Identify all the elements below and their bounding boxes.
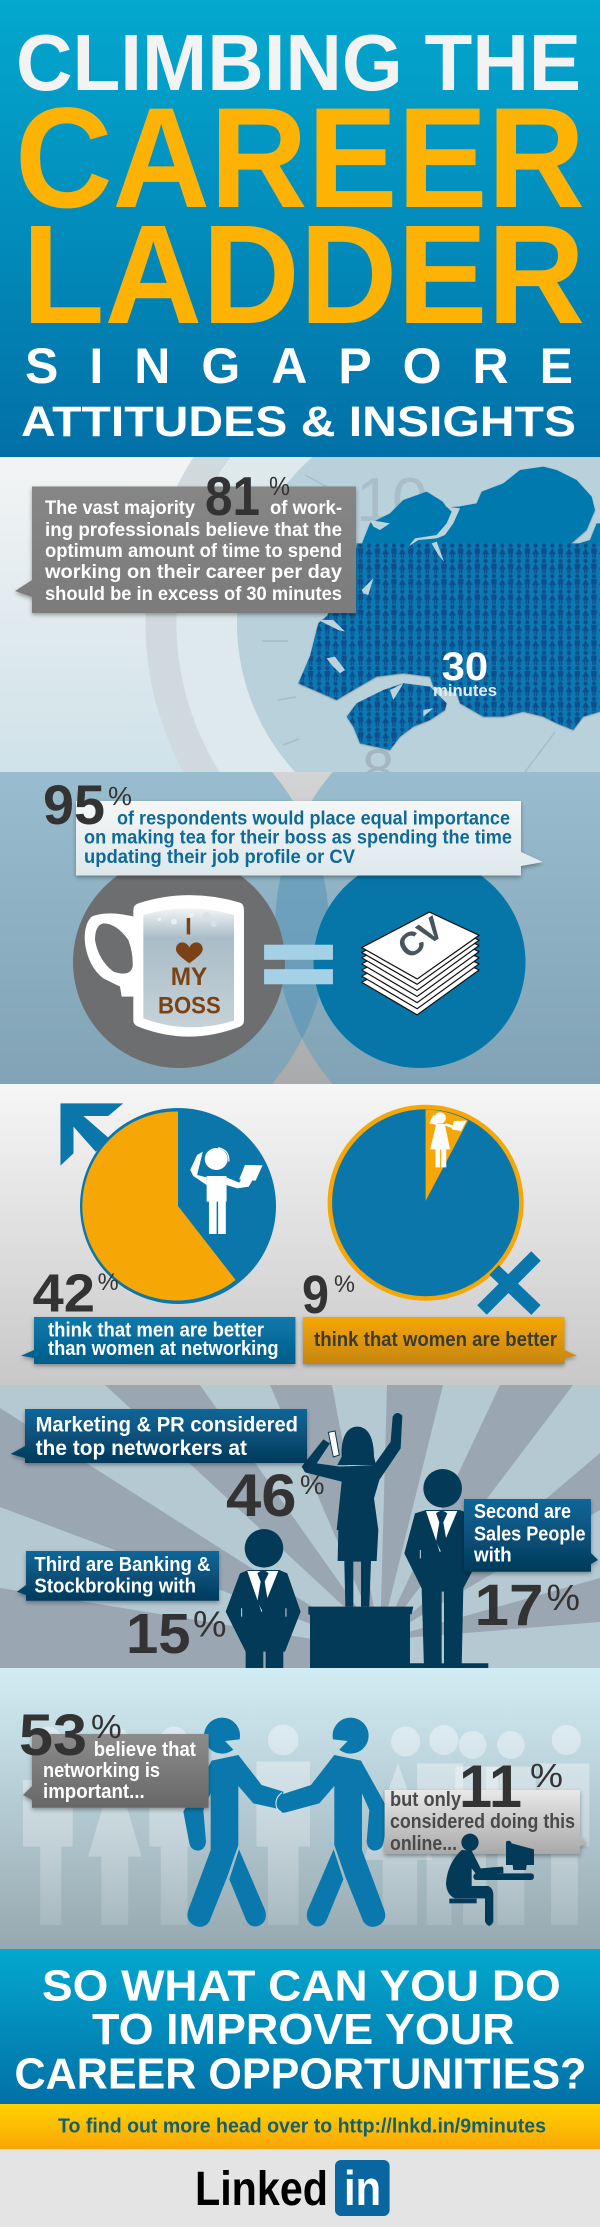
- map of Singapore: [298, 467, 600, 750]
- clock face: 10: [356, 466, 428, 535]
- callout: 81 percent: optimum amount of time to spend: [45, 541, 342, 562]
- footer: LinkedIn logo: Linked: [195, 2163, 328, 2216]
- callout: banking and stockbroking: Third are Banking &: [34, 1554, 210, 1576]
- panel: top networkers by profession: [0, 1385, 600, 1668]
- callout: 81 percent: working on their career per day: [44, 562, 342, 583]
- stat: 15 percent: 15: [126, 1602, 191, 1666]
- icon: man with phone and tablet: [190, 1148, 263, 1234]
- sunburst rays: [0, 1385, 600, 1668]
- silhouette: third man: [226, 1529, 301, 1668]
- callout: 81 percent: [15, 465, 356, 613]
- panel: 81 percent thirty minutes: [0, 457, 600, 772]
- footer: LinkedIn logo: [0, 2149, 600, 2227]
- callout: 11 percent: but only: [390, 1789, 462, 1811]
- icon: equals sign: [264, 945, 333, 984]
- icon: male arrow: [60, 1103, 123, 1166]
- right man: [276, 1718, 389, 1927]
- heading: so what can you do: TO IMPROVE YOUR: [92, 2005, 515, 2054]
- callout: banking and stockbroking: [17, 1551, 219, 1601]
- callout: sales people: with: [473, 1545, 512, 1567]
- icon: woman with phone and tablet: [429, 1112, 467, 1167]
- pie chart: women 9 percent: [328, 1105, 524, 1301]
- panel: call to action: [0, 1949, 600, 2104]
- stat: 9 percent: %: [334, 1271, 355, 1298]
- callout: 81 percent: of work-: [270, 498, 342, 519]
- callout: 53 percent: networking is: [43, 1760, 160, 1782]
- callout: men: [21, 1317, 295, 1364]
- silhouette: woman with phone: [302, 1413, 402, 1607]
- clock face: [146, 457, 600, 772]
- callout: 11 percent: online...: [390, 1833, 457, 1855]
- callout: banking and stockbroking: Stockbroking with: [34, 1576, 196, 1598]
- label: 30 minutes: [434, 652, 496, 696]
- label: 30 minutes: minutes: [433, 681, 497, 700]
- label: 30 minutes: 30: [442, 645, 488, 689]
- callout: marketing and PR: the top networkers at: [36, 1437, 247, 1460]
- callout: 81 percent: The vast majority: [45, 498, 195, 519]
- icon: mug: BOSS: [158, 992, 221, 1019]
- callout: women: think that women are better: [314, 1329, 557, 1351]
- heading: so what can you do: SO WHAT CAN YOU DO: [42, 1962, 561, 2011]
- stat: 42 percent: [32, 1264, 119, 1324]
- heading: so what can you do: CAREER OPPORTUNITIES?: [14, 2049, 586, 2098]
- stat: 15 percent: [130, 1611, 226, 1654]
- callout: 11 percent: 11: [459, 1753, 522, 1820]
- callout: 53 percent: important...: [43, 1781, 145, 1803]
- callout: 11 percent: %: [530, 1757, 563, 1794]
- grey circle: [73, 856, 285, 1068]
- callout: 95 percent: %: [108, 781, 132, 811]
- icon: mug: MY: [171, 963, 208, 991]
- background crowd: [23, 1725, 589, 1925]
- callout: 95 percent: 95: [43, 773, 105, 836]
- blue circle: [314, 856, 526, 1068]
- stat: 9 percent: 9: [302, 1265, 329, 1325]
- stat: 17 percent: [478, 1584, 579, 1626]
- callout: 95 percent: on making tea for their boss as spending the time: [84, 828, 512, 849]
- callout: 11 percent: considered doing this: [390, 1811, 575, 1833]
- callout: 53 percent: believe that: [94, 1739, 196, 1761]
- callout: 81 percent: %: [269, 471, 290, 501]
- heading: so what can you do: [14, 1962, 586, 2098]
- callout: 53 percent: %: [91, 1708, 122, 1745]
- banner: find out more: To find out more head over to http://lnkd.in/9minutes: [58, 2116, 546, 2138]
- icon: mug: [85, 895, 244, 1037]
- callout: marketing and PR: Marketing & PR considered: [36, 1414, 298, 1437]
- callout: 53 percent: [19, 1703, 209, 1808]
- stat: 42 percent: %: [98, 1269, 119, 1296]
- title: climbing the: CLIMBING THE: [16, 18, 581, 107]
- callout: 95 percent: [43, 773, 543, 876]
- icon: stack of CVs: CV: [391, 909, 450, 966]
- stat: 9 percent: [302, 1265, 355, 1325]
- callout: 95 percent: of respondents would place equal importance: [117, 808, 510, 830]
- callout: 81 percent: ing professionals believe that the: [45, 520, 342, 541]
- silhouette: second man: [404, 1469, 472, 1664]
- stat: 15 percent: %: [193, 1604, 226, 1645]
- left man: [183, 1718, 283, 1927]
- icon: person at computer: [446, 1834, 534, 1926]
- panel: header: [0, 0, 600, 457]
- callout: women: [303, 1317, 577, 1364]
- callout: men: think that men are better: [48, 1320, 264, 1342]
- panel: 95 percent tea or CV: [0, 772, 600, 1084]
- panel: importance of networking: [0, 1668, 600, 1949]
- icon: mug: I: [185, 914, 192, 940]
- icon: two men shaking hands: [183, 1718, 389, 1927]
- panel: men versus women networking: [0, 1084, 600, 1385]
- callout: sales people: Sales People: [474, 1524, 586, 1546]
- clock face: 8: [362, 738, 394, 803]
- banner: find out more: [0, 2104, 600, 2149]
- stat: 17 percent: %: [546, 1577, 580, 1618]
- title: ladder: LADDER: [22, 195, 585, 353]
- subtitle: attitudes and insights: ATTITUDES & INSIGHTS: [21, 398, 576, 446]
- subtitle: singapore: SINGAPORE: [25, 338, 573, 394]
- callout: 11 percent: [385, 1753, 587, 1855]
- footer: LinkedIn logo: in: [344, 2162, 381, 2216]
- stat: 46 percent: [226, 1474, 324, 1516]
- stat: 17 percent: 17: [474, 1573, 544, 1638]
- stat: 46 percent: 46: [226, 1462, 297, 1529]
- callout: marketing and PR: [11, 1409, 307, 1463]
- callout: 81 percent: 81: [205, 465, 260, 527]
- callout: 53 percent: 53: [19, 1703, 87, 1768]
- icon: stack of CVs: [362, 909, 479, 1015]
- callout: sales people: Second are: [474, 1501, 571, 1523]
- icon: female cross: [482, 1256, 536, 1310]
- callout: sales people: [464, 1499, 598, 1572]
- stat: 42 percent: 42: [32, 1264, 95, 1324]
- callout: men: than women at networking: [48, 1338, 279, 1360]
- callout: 95 percent: updating their job profile or CV: [84, 847, 355, 868]
- podium: [308, 1607, 488, 1668]
- stat: 46 percent: %: [300, 1470, 324, 1500]
- callout: 81 percent: should be in excess of 30 minutes: [45, 584, 342, 605]
- pie chart: men 42 percent: [80, 1108, 276, 1304]
